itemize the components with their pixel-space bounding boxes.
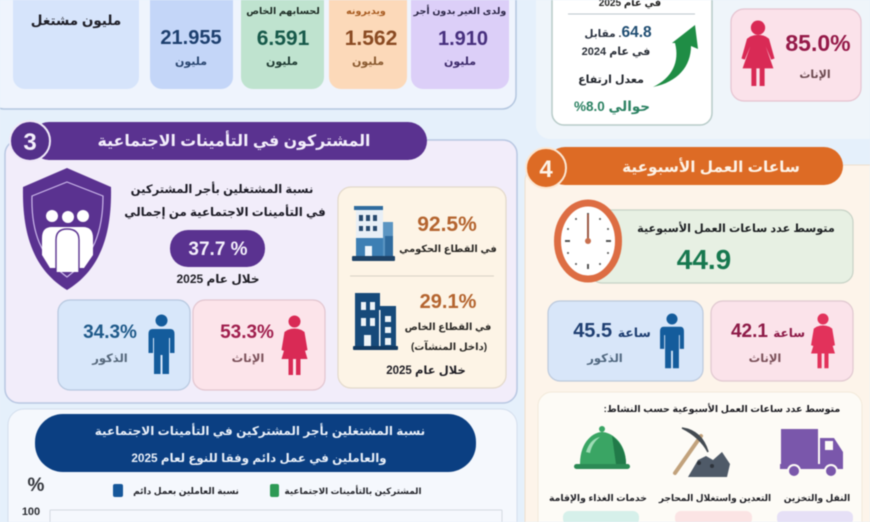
icon: shield with people [23, 168, 111, 290]
card: hours by activity [538, 392, 862, 522]
pill: 37.7% [170, 230, 265, 267]
card: total employed [13, 0, 139, 89]
card: growth figures: 64.8. مقابل [584, 24, 652, 41]
icon: rising arrow [653, 25, 698, 87]
card: average hours [590, 210, 853, 283]
card: females insured: 53.3% [220, 322, 274, 343]
card: unpaid family workers [411, 0, 509, 89]
heading bar: ساعات العمل الأسبوعية [622, 157, 800, 176]
card: wage workers: 21.955 [160, 27, 222, 49]
panel 1: employment status [0, 0, 516, 109]
panel 3: social insurance subscribers [5, 121, 517, 403]
chart title [35, 414, 476, 472]
number badge 3: 3 [23, 129, 37, 156]
card: unpaid family workers: مليون [444, 56, 476, 68]
card: female rate: الإناث [799, 69, 831, 81]
icon: clock [558, 203, 618, 279]
chart legend: المشتركين بالتأمينات الاجتماعية [285, 485, 421, 497]
card: males insured [58, 300, 190, 390]
icon: pickaxe and rocks [675, 428, 730, 477]
text: share of insured wage workers [124, 181, 326, 220]
card: sector shares: 29.1% [420, 291, 477, 313]
heading bar [546, 147, 843, 185]
number badge 4: 4 [539, 156, 553, 183]
card: growth figures: معدل ارتفاع [578, 74, 644, 86]
card: hours by activity: خدمات الغذاء والإقامة [549, 493, 647, 504]
chart legend [113, 484, 421, 497]
icon: food cloche [574, 426, 630, 469]
card: growth figures: حوالي 8.0% [574, 99, 650, 114]
card: sector shares: في القطاع الخاص [405, 322, 491, 333]
card: female hours: ساعة 42.1 [731, 321, 805, 342]
card: hours by activity: متوسط عدد ساعات العمل الأسبوعية حسب النشاط: [604, 403, 840, 415]
card: hours by activity: التعدين واستغلال المحاجر [658, 493, 771, 504]
icon: man [660, 313, 684, 368]
chart title: والعاملين في عمل دائم وفقا للنوع لعام 2025 [131, 451, 387, 466]
icon: woman [811, 313, 835, 368]
chart title: نسبة المشتغلين بأجر المشتركين في التأمينات الاجتماعية [95, 423, 425, 438]
icon: woman [282, 316, 308, 375]
card: males insured: الذكور [91, 353, 128, 366]
card: sector shares [338, 187, 506, 388]
chart axis [22, 475, 502, 522]
icon: government building [352, 206, 395, 261]
card: growth figures: في عام 2024 [582, 46, 650, 58]
card: average hours: 44.9 [677, 244, 731, 275]
chart legend: نسبة العاملين بعمل دائم [133, 486, 239, 497]
card: females insured [193, 300, 325, 390]
icon: man [148, 314, 174, 374]
card: unpaid family workers: ولدى الغير بدون أجر [413, 4, 506, 17]
text: during 2025: خلال عام 2025 [176, 272, 260, 287]
card: employers [329, 0, 407, 89]
card: female hours: الإناث [749, 353, 781, 365]
card: self-employed: 6.591 [257, 27, 310, 50]
card: self-employed: مليون [266, 56, 298, 68]
card: employers: 1.562 [345, 27, 397, 50]
number badge 4 [526, 148, 566, 188]
card: unpaid family workers: 1.910 [438, 28, 488, 50]
card: female rate: 85.0% [785, 30, 851, 56]
text: share of insured wage workers: في التأمينات الاجتماعية من إجمالي [124, 204, 326, 220]
card: females insured: الإناث [232, 353, 264, 365]
icon: woman [742, 21, 774, 86]
card: male hours: ساعة 45.5 [573, 320, 651, 342]
number badge 3 [10, 121, 50, 161]
icon: truck [780, 429, 843, 478]
card: employers: مليون [352, 56, 384, 68]
card: wage workers: مليون [175, 56, 207, 68]
card: males insured: 34.3% [83, 322, 137, 343]
card: average hours: متوسط عدد ساعات العمل الأسبوعية [637, 221, 835, 235]
panel 5: chart of insured and permanent workers [8, 409, 517, 522]
card: total employed: مليون مشتغل [31, 13, 121, 28]
card: sector shares: (داخل المنشآت) [411, 340, 487, 353]
card: hours by activity: النقل والتخزين [784, 493, 850, 504]
heading bar [30, 122, 427, 160]
panel 2: growth rate [536, 0, 870, 139]
card: self-employed: لحسابهم الخاص [246, 6, 320, 17]
card: female rate [731, 9, 861, 101]
chart axis: % [28, 475, 45, 496]
card: employers: ويديرونه [346, 6, 386, 17]
text: share of insured wage workers: نسبة المشتغلين بأجر المشتركين [131, 181, 313, 197]
card: growth figures [552, 0, 712, 125]
heading bar: المشتركون في التأمينات الاجتماعية [98, 130, 370, 151]
card: sector shares: في القطاع الحكومي [399, 244, 497, 255]
chart axis: 100 [22, 506, 40, 518]
card: male hours: الذكور [586, 353, 623, 366]
pill: 37.7%: 37.7 % [188, 239, 248, 260]
card: sector shares: 92.5% [417, 213, 477, 236]
panel 4: weekly working hours [525, 147, 870, 522]
card: wage workers [150, 0, 233, 89]
card: male hours [548, 301, 703, 381]
card: female hours [711, 301, 853, 381]
card: self-employed [241, 0, 324, 89]
icon: private-sector building [353, 293, 398, 350]
card: sector shares: خلال عام 2025 [386, 365, 466, 377]
